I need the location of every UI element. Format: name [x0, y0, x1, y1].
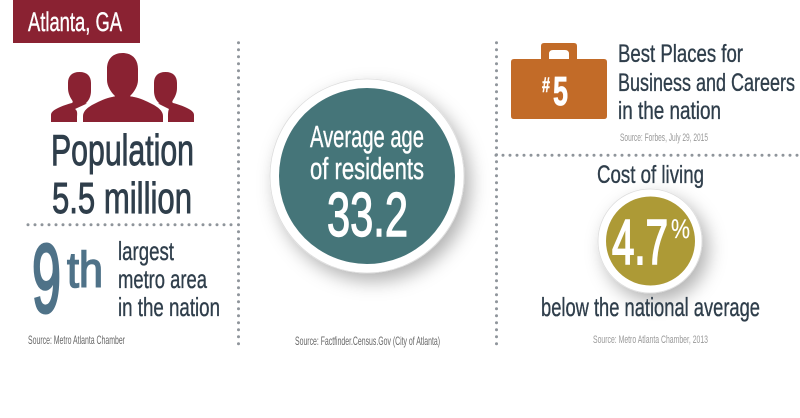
- metro area description: [118, 236, 220, 322]
- badge: 4.7%: %: [671, 214, 690, 244]
- icon: three people: [51, 53, 194, 122]
- metro area description: largest: [118, 236, 175, 266]
- population figure: Population: [51, 126, 194, 175]
- badge: 4.7%: 4.7: [612, 208, 668, 278]
- heading: cost of living: Cost of living: [597, 161, 704, 189]
- business ranking text: in the nation: [618, 97, 721, 125]
- rank number: 9th: th: [67, 242, 103, 298]
- badge: average age of residents: Average age: [310, 119, 424, 154]
- source: Forbes: Source: Forbes, July 29, 2015: [620, 132, 708, 144]
- icon: briefcase with rank #5: #: [542, 74, 550, 97]
- business ranking text: Best Places for: [618, 40, 743, 68]
- business ranking text: [618, 40, 795, 125]
- metro area description: metro area: [118, 264, 207, 294]
- rank number: 9th: 9: [32, 224, 61, 333]
- badge: 4.7%: [598, 189, 702, 293]
- metro area description: in the nation: [118, 292, 220, 322]
- source: cost of living: Source: Metro Atlanta Chamber, 2013: [593, 334, 708, 346]
- source: metro area: Source: Metro Atlanta Chamber: [28, 333, 125, 347]
- badge: average age of residents: [270, 79, 464, 273]
- icon: briefcase with rank #5: [511, 43, 607, 119]
- metro area rank: [32, 224, 220, 333]
- location tag: Atlanta, GA: [13, 0, 140, 43]
- badge: average age of residents: of residents: [310, 151, 424, 186]
- population figure: [51, 126, 194, 223]
- badge: average age of residents: 33.2: [327, 181, 408, 250]
- source: census: Source: Factfinder.Census.Gov (City of Atlanta): [295, 334, 440, 348]
- icon: briefcase with rank #5: 5: [553, 68, 568, 114]
- population figure: 5.5 million: [52, 174, 192, 223]
- location tag: Atlanta, GA: Atlanta, GA: [28, 7, 122, 37]
